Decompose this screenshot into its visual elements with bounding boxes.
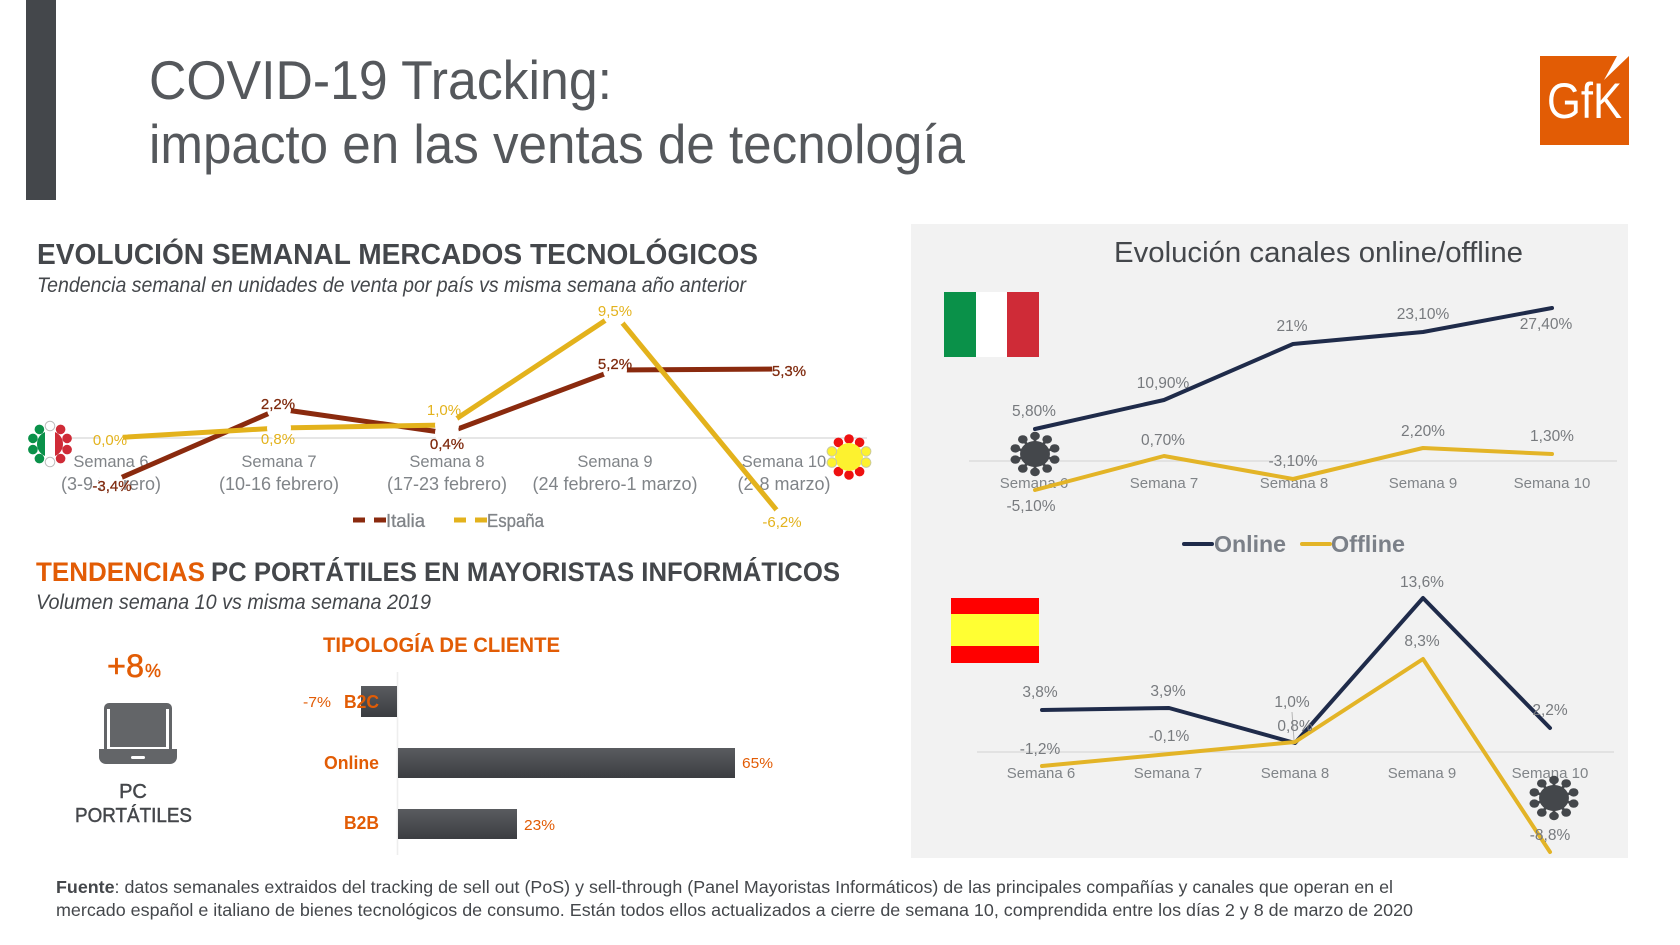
heading: tipología de cliente: TIPOLOGÍA DE CLIENTE [323,634,560,657]
line chart: Italia online/offline [969,306,1617,515]
bar chart: tipología de cliente: B2C [344,692,379,712]
line chart: mercados tecnológicos Italia y España: 5,3% [772,363,806,380]
line chart: mercados tecnológicos Italia y España: Semana 10 [742,453,826,471]
title: COVID-19 Tracking: [149,49,612,111]
line chart: mercados tecnológicos Italia y España: 0,4% [430,436,464,453]
line chart: Italia online/offline: Semana 9 [1389,475,1457,492]
line chart: Italia online/offline: 1,30% [1530,428,1574,445]
line chart: España online/offline: 1,0% [1274,694,1310,711]
line chart: mercados tecnológicos Italia y España: 0,8% [261,431,295,448]
line chart: mercados tecnológicos Italia y España: Semana 7 [241,453,317,471]
panel heading: Evolución canales online/offline [1114,237,1523,269]
line chart: mercados tecnológicos Italia y España: (17-23 febrero) [387,474,507,494]
line chart: mercados tecnológicos Italia y España: 1,0% [427,402,461,419]
GfK logo [1540,56,1629,145]
line chart: mercados tecnológicos Italia y España: 5,2% [598,356,632,373]
line chart: mercados tecnológicos Italia y España: 0,0% [93,432,127,449]
subtitle: tendencias: Volumen semana 10 vs misma semana 2019 [36,591,431,614]
icon: laptop [99,703,177,764]
legend: online / offline: Offline [1331,531,1405,557]
icon: virus España [827,434,871,480]
line chart: Italia online/offline: 5,80% [1012,403,1056,420]
line chart: España online/offline: 13,6% [1400,574,1444,591]
line chart: Italia online/offline: Semana 6 [1000,475,1068,492]
line chart: Italia online/offline: Semana 7 [1130,475,1198,492]
icon: virus Italia [28,421,72,467]
line chart: mercados tecnológicos Italia y España [61,302,867,531]
footer source note: Fuente: datos semanales extraidos del tracking de sell out (PoS) y sell-through (Panel Mayoristas Informáticos) de las principales compañías y canales que operan en el [56,877,1393,897]
KPI: +8% PC portátiles [75,648,192,827]
flag: España [951,598,1039,663]
line chart: mercados tecnológicos Italia y España: (2-8 marzo) [737,474,831,494]
bar chart: tipología de cliente: 65% [742,755,773,772]
KPI: +8% PC portátiles: PC [119,781,147,803]
heading: tendencias PC portátiles: TENDENCIAS [36,557,205,587]
line chart: Italia online/offline: -5,10% [1006,498,1056,515]
line chart: Italia online/offline: 10,90% [1137,375,1189,392]
line chart: mercados tecnológicos Italia y España: -6,2% [762,514,802,531]
line chart: Italia online/offline: 23,10% [1397,306,1449,323]
line chart: España online/offline: Semana 7 [1134,765,1202,782]
bar chart: tipología de cliente: B2B [344,813,379,833]
bar chart: tipología de cliente: Online [324,753,379,773]
line chart: España online/offline [977,574,1614,852]
line chart: España online/offline: Semana 8 [1261,765,1329,782]
subtitle: evolución semanal: Tendencia semanal en unidades de venta por país vs misma semana año anterior [37,274,747,297]
footer source note: mercado español e italiano de bienes tecnológicos de consumo. Están todos ellos actualizados a cierre de semana 10, comprendida entre los días 2 y 8 de marzo de 2020 [56,900,1413,920]
line chart: Italia online/offline: 27,40% [1520,316,1572,333]
heading: tendencias PC portátiles: PC PORTÁTILES EN MAYORISTAS INFORMÁTICOS [211,556,840,587]
line chart: mercados tecnológicos Italia y España: (10-16 febrero) [219,474,339,494]
line chart: Italia online/offline: Semana 8 [1260,475,1328,492]
line chart: España online/offline: 0,8% [1277,718,1313,735]
bar chart: tipología de cliente: -7% [303,694,331,711]
title: impacto en las ventas de tecnología [149,113,965,175]
legend: online / offline [1184,531,1405,557]
line chart: España online/offline: 3,9% [1150,683,1186,700]
heading: evolución semanal: EVOLUCIÓN SEMANAL MERCADOS TECNOLÓGICOS [37,237,758,271]
title [149,49,965,175]
chart legend: Italia / España: Italia [386,511,426,531]
line chart: mercados tecnológicos Italia y España: 2,2% [261,396,295,413]
icon: virus sobre semana 10 [1530,776,1578,820]
header accent bar [26,0,56,200]
bar chart: tipología de cliente [303,672,773,855]
KPI: +8% PC portátiles: PORTÁTILES [75,804,192,827]
line chart: mercados tecnológicos Italia y España: 9,5% [598,303,632,320]
line chart: mercados tecnológicos Italia y España: Semana 8 [409,453,485,471]
line chart: España online/offline: 3,8% [1022,684,1058,701]
line chart: Italia online/offline: 0,70% [1141,432,1185,449]
flag: Italia [944,292,1039,357]
line chart: mercados tecnológicos Italia y España: Semana 6 [73,453,149,471]
icon: virus sobre semana 6 [1011,432,1059,476]
line chart: Italia online/offline: 21% [1276,318,1308,335]
line chart: mercados tecnológicos Italia y España: (24 febrero-1 marzo) [532,474,698,494]
line chart: Italia online/offline: Semana 10 [1514,475,1590,492]
KPI: +8% PC portátiles: +8 [107,648,144,684]
line chart: Italia online/offline: -3,10% [1268,453,1318,470]
line chart: España online/offline: Semana 6 [1007,765,1075,782]
footer source note [56,877,1413,920]
line chart: España online/offline: -8,8% [1530,827,1570,844]
line chart: mercados tecnológicos Italia y España: -3,4% [92,478,132,495]
line chart: mercados tecnológicos Italia y España: Semana 9 [577,453,653,471]
bar chart: tipología de cliente: 23% [524,817,555,834]
chart legend: Italia / España [353,511,545,531]
line chart: España online/offline: Semana 10 [1512,765,1588,782]
KPI: +8% PC portátiles: % [145,661,161,681]
panel: canales online/offline [911,224,1628,858]
line chart: España online/offline: -1,2% [1020,741,1060,758]
line chart: Italia online/offline: 2,20% [1401,423,1445,440]
line chart: España online/offline: -0,1% [1149,728,1189,745]
GfK logo: GfK [1547,73,1622,129]
legend: online / offline: Online [1214,531,1286,557]
chart legend: Italia / España: España [487,511,545,531]
line chart: España online/offline: 8,3% [1404,633,1440,650]
line chart: España online/offline: Semana 9 [1388,765,1456,782]
line chart: mercados tecnológicos Italia y España: (3-9 febrero) [61,474,161,494]
line chart: España online/offline: 2,2% [1532,702,1568,719]
